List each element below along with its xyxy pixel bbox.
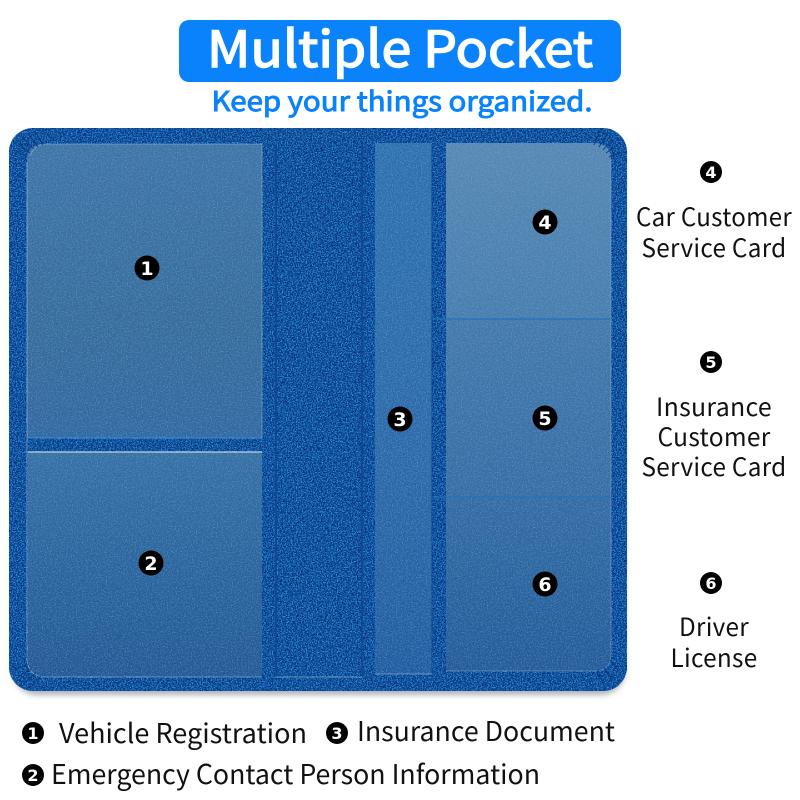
- legend: vehicle registration: Vehicle Registration: [59, 712, 307, 751]
- label: car customer service card: [636, 161, 792, 265]
- marker 2 on pocket: [138, 550, 164, 576]
- corner stitching: [14, 131, 622, 687]
- label: insurance customer service card: Service Card: [642, 448, 786, 484]
- marker 6 on pocket: 6: [538, 574, 552, 596]
- wallet photo: [9, 128, 627, 695]
- label: insurance customer service card: [642, 351, 786, 484]
- title banner: Multiple Pocket: [207, 10, 593, 82]
- panel: right pocket 4: [446, 143, 611, 319]
- label: driver license: Driver: [679, 608, 749, 644]
- panel: left pocket 2: [28, 452, 262, 677]
- legend: emergency contact person information: Emergency Contact Person Information: [51, 753, 540, 792]
- panel: left pocket 1: [27, 144, 262, 438]
- marker 4 on pocket: 4: [538, 212, 552, 234]
- legend: insurance document: Insurance Document: [357, 710, 615, 749]
- legend: vehicle registration: 1: [27, 724, 39, 743]
- legend: emergency contact person information: 2: [27, 766, 39, 785]
- marker 6 on pocket: [532, 572, 558, 596]
- label: insurance customer service card: 5: [705, 353, 717, 372]
- marker 1 on pocket: 1: [140, 258, 154, 280]
- label: car customer service card: Service Card: [642, 229, 786, 265]
- panel: right pocket 5: [446, 319, 611, 497]
- label: car customer service card: Car Customer: [636, 198, 792, 234]
- marker 3 on pocket: [388, 406, 412, 432]
- panel: pocket 3: [375, 143, 432, 674]
- marker 1 on pocket: [134, 256, 160, 280]
- marker 5 on pocket: [532, 406, 558, 430]
- subtitle: Keep your things organized.: [212, 80, 592, 119]
- label: driver license: [670, 572, 758, 675]
- marker 3 on pocket: 3: [393, 409, 407, 431]
- marker 4 on pocket: [532, 210, 558, 234]
- label: car customer service card: 4: [705, 163, 717, 182]
- panel: right pocket 6: [446, 497, 611, 671]
- label: insurance customer service card: Insurance: [656, 388, 772, 424]
- label: driver license: 6: [705, 574, 717, 593]
- legend: insurance document: 3: [331, 724, 343, 743]
- label: driver license: License: [670, 639, 758, 675]
- marker 2 on pocket: 2: [144, 553, 158, 575]
- label: insurance customer service card: Customer: [658, 418, 770, 454]
- marker 5 on pocket: 5: [538, 408, 552, 430]
